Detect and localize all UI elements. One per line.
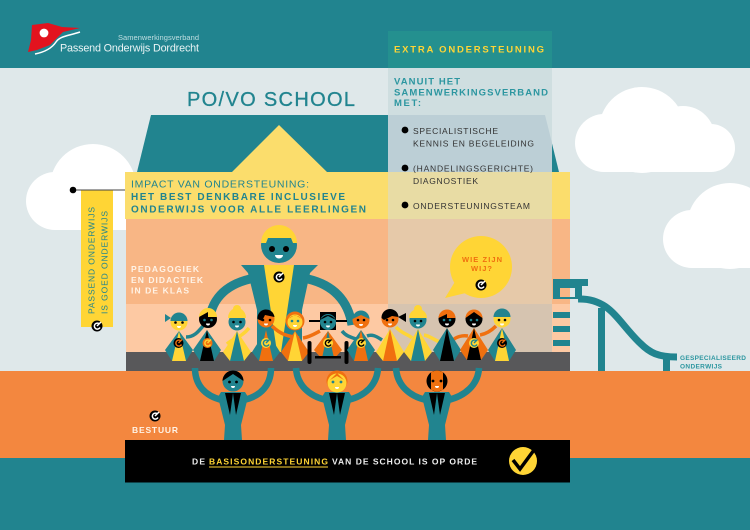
label: pedagogiek en didactiek: EN DIDACTIEK [131, 275, 204, 285]
logo [28, 23, 199, 54]
board member 3 [396, 368, 479, 440]
black bar: basisondersteuning: BASISONDERSTEUNING [209, 456, 328, 466]
child 2 [193, 308, 221, 361]
speech bubble: wie zijn wij [445, 236, 512, 298]
label: pedagogiek en didactiek: IN DE KLAS [131, 286, 189, 296]
black bar: basisondersteuning [125, 440, 570, 482]
panel: extra ondersteuning: KENNIS EN BEGELEIDING [413, 138, 534, 148]
children arms [186, 326, 496, 344]
child 11 [460, 310, 488, 360]
child 1 [165, 312, 193, 361]
orange ground band [0, 371, 750, 458]
panel: extra ondersteuning: DIAGNOSTIEK [413, 176, 478, 186]
teacher [209, 225, 352, 352]
speech bubble: wie zijn wij: WIE ZIJN [462, 255, 502, 264]
speech bubble: wie zijn wij: WIJ? [471, 264, 492, 273]
cloud: lower right [663, 183, 750, 269]
label: gespecialiseerd onderwijs [680, 355, 746, 370]
panel: extra ondersteuning: SAMENWERKINGSVERBAND [394, 88, 548, 98]
child 9 [404, 305, 432, 361]
header band [0, 0, 750, 68]
impact band: ONDERWIJS VOOR ALLE LEERLINGEN [131, 204, 366, 216]
label: gespecialiseerd onderwijs: GESPECIALISEERD [680, 355, 746, 362]
label: gespecialiseerd onderwijs: ONDERWIJS [680, 364, 723, 370]
board member 2 [296, 368, 378, 440]
impact band: HET BEST DENKBARE INCLUSIEVE [131, 192, 345, 203]
banner: passend onderwijs: PASSEND ONDERWIJS [86, 207, 96, 314]
panel: extra ondersteuning: SPECIALISTISCHE [413, 126, 498, 136]
child 6 in wheelchair [308, 312, 348, 364]
label: pedagogiek en didactiek [131, 264, 204, 296]
black bar: basisondersteuning: DE [192, 456, 205, 466]
cloud: left [26, 144, 145, 230]
panel: extra ondersteuning [388, 31, 552, 352]
logo: Samenwerkingsverband [118, 33, 199, 42]
school building wall [126, 219, 570, 371]
teal bottom band [0, 458, 750, 530]
child 7 [347, 310, 375, 361]
child 8 [376, 309, 406, 361]
panel: extra ondersteuning: MET: [394, 98, 421, 109]
impact band: IMPACT VAN ONDERSTEUNING: [131, 178, 309, 190]
panel: extra ondersteuning: ONDERSTEUNINGSTEAM [413, 201, 530, 211]
child 4 [252, 309, 280, 361]
slide [553, 279, 677, 371]
child 10 [433, 310, 461, 361]
impact band [125, 172, 570, 219]
roof gable [232, 125, 327, 172]
board member 1 [195, 368, 271, 440]
label: pedagogiek en didactiek: PEDAGOGIEK [131, 264, 200, 274]
logo: Passend Onderwijs Dordrecht [60, 42, 199, 54]
title: PO/VO school: PO/VO SCHOOL [187, 89, 355, 111]
panel: extra ondersteuning: EXTRA ONDERSTEUNING [394, 44, 544, 56]
child 12 [488, 308, 516, 361]
child 5 [281, 312, 309, 361]
cloud: top right [575, 87, 735, 173]
label: bestuur [132, 410, 178, 435]
panel: extra ondersteuning: (HANDELINGSGERICHTE) [413, 164, 533, 174]
panel: extra ondersteuning: VANUIT HET [394, 76, 460, 88]
label: bestuur: BESTUUR [132, 425, 178, 435]
banner: passend onderwijs: IS GOED ONDERWIJS [100, 211, 110, 314]
banner: passend onderwijs [70, 187, 125, 332]
black bar: basisondersteuning: VAN DE SCHOOL IS OP ORDE [332, 456, 477, 466]
child 3 [223, 305, 251, 361]
school roof [137, 115, 559, 172]
